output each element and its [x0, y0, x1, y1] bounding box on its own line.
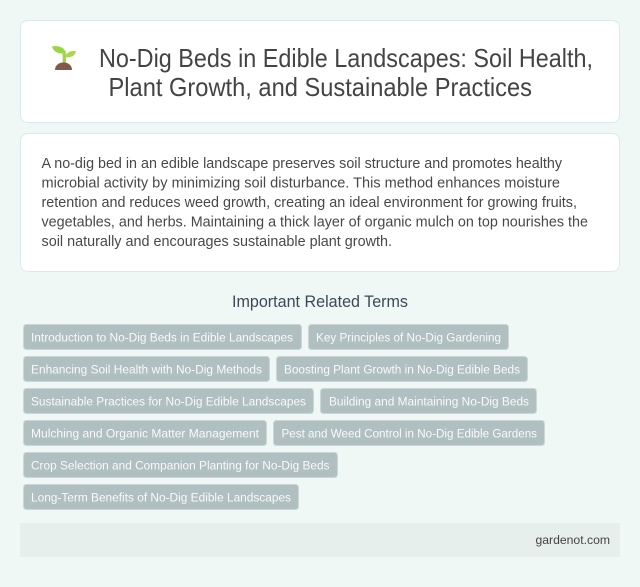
tag: mulching: Mulching and Organic Matter Management: [31, 426, 260, 440]
tag: soil health: [24, 356, 270, 382]
icon: sprout: [52, 46, 76, 70]
title: [99, 45, 593, 102]
description text: microbial activity by minimizing soil disturbance. This method enhances moisture: [42, 176, 560, 192]
tag: crop selection: [24, 452, 338, 478]
tag: introduction: Introduction to No-Dig Beds in Edible Landscapes: [31, 330, 293, 344]
tag: mulching: [24, 420, 266, 446]
footer text: gardenot.com: [536, 533, 610, 547]
tag: building and maintaining: [320, 388, 536, 414]
description text: vegetables, and herbs. Maintaining a thick layer of organic mulch on top nourishes the: [42, 214, 588, 230]
description text: soil naturally and encourages sustainable plant growth.: [42, 234, 392, 250]
tag: plant growth: [276, 356, 528, 382]
description text: [42, 156, 588, 250]
tag: crop selection: Crop Selection and Companion Planting for No-Dig Beds: [31, 458, 330, 472]
panel: description card: [20, 134, 620, 272]
tag: pest and weed control: Pest and Weed Control in No-Dig Edible Gardens: [282, 426, 537, 440]
panel: title card: [20, 20, 620, 122]
tag: building and maintaining: Building and Maintaining No-Dig Beds: [329, 394, 529, 408]
description text: retention and reduces weed growth, creating an ideal environment for growing fruits,: [42, 195, 577, 211]
heading: important related terms: Important Related Terms: [232, 293, 408, 311]
tag: sustainable practices: Sustainable Practices for No-Dig Edible Landscapes: [31, 394, 306, 408]
tag: sustainable practices: [24, 388, 314, 414]
panel: related term tags: [24, 324, 544, 510]
tag: soil health: Enhancing Soil Health with No-Dig Methods: [31, 362, 262, 376]
tag: introduction: [24, 324, 302, 350]
title: Plant Growth, and Sustainable Practices: [108, 74, 532, 102]
tag: long-term benefits: Long-Term Benefits of No-Dig Edible Landscapes: [31, 490, 291, 504]
description text: A no-dig bed in an edible landscape preserves soil structure and promotes healthy: [42, 156, 563, 172]
tag: key principles: [308, 324, 508, 350]
tag: pest and weed control: [274, 420, 544, 446]
tag: key principles: Key Principles of No-Dig Gardening: [316, 330, 501, 344]
title: No-Dig Beds in Edible Landscapes: Soil Health,: [99, 45, 593, 73]
footer bar: [20, 523, 620, 557]
tag: plant growth: Boosting Plant Growth in No-Dig Edible Beds: [284, 362, 520, 376]
tag: long-term benefits: [24, 484, 298, 510]
